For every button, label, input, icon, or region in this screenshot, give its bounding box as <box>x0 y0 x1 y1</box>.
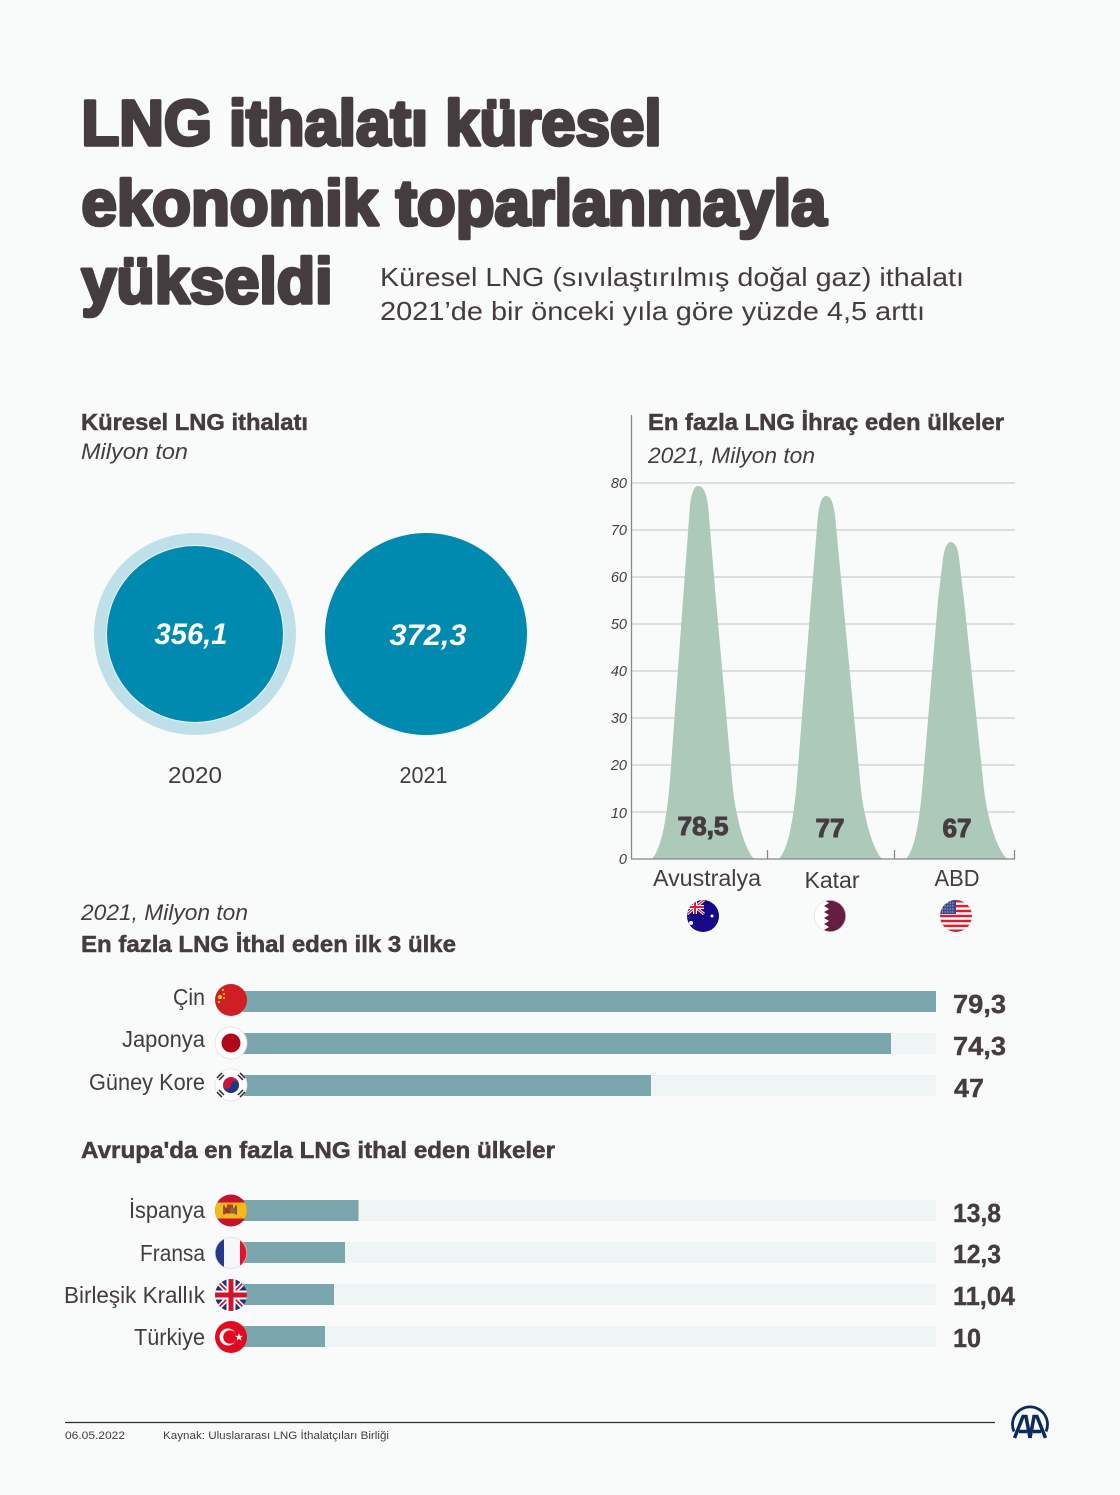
label: USA: ABD <box>934 865 980 891</box>
date: 06.05.2022 <box>65 1430 125 1442</box>
bar row: Turkey <box>134 1321 981 1353</box>
unit label: Milyon ton <box>81 439 188 464</box>
y axis labels: 70 <box>611 523 627 539</box>
icon: Qatar flag <box>814 900 846 932</box>
label: Qatar: Katar <box>804 867 860 893</box>
chart grid <box>631 483 1015 812</box>
bar row: South Korea: 47 <box>954 1073 984 1103</box>
circle 2020: 356,1 <box>154 618 228 651</box>
bar row: Japan: Japonya <box>122 1026 205 1052</box>
unit label: 2021, Milyon ton <box>80 900 248 925</box>
panel: Europe importers <box>64 1137 1016 1353</box>
axes <box>631 415 1015 859</box>
bar row: China: 79,3 <box>953 989 1006 1019</box>
label: Australia: Avustralya <box>653 865 761 891</box>
bar row: Spain <box>129 1194 1001 1228</box>
y axis labels: 0 <box>619 852 627 868</box>
title: LNG ithalatı küresel <box>82 87 662 159</box>
bar row: South Korea <box>89 1069 984 1103</box>
bar row: Turkey: Türkiye <box>134 1324 205 1350</box>
bar row: United Kingdom <box>64 1279 1016 1311</box>
y axis labels: 20 <box>610 758 627 774</box>
circle 2020 <box>94 533 296 735</box>
peak: Qatar <box>779 496 882 859</box>
bar row: United Kingdom: 11,04 <box>953 1281 1016 1311</box>
subtitle: 2021’de bir önceki yıla göre yüzde 4,5 arttı <box>380 296 925 326</box>
value: Australia: 78,5 <box>678 811 728 841</box>
bar row: France: Fransa <box>140 1240 205 1266</box>
bar row: Japan <box>122 1026 1006 1061</box>
peak: USA <box>906 542 1007 859</box>
bar row: France: 12,3 <box>953 1239 1001 1269</box>
value: Qatar: 77 <box>816 813 844 843</box>
bar row: Spain: 13,8 <box>953 1198 1001 1228</box>
y axis labels: 60 <box>611 570 627 586</box>
bar row: Spain: İspanya <box>129 1197 205 1223</box>
chart unit label: 2021, Milyon ton <box>647 443 815 468</box>
circle 2021 <box>325 533 527 735</box>
bar row: Turkey: 10 <box>953 1323 981 1353</box>
heading: global LNG imports: Küresel LNG ithalatı <box>81 409 308 435</box>
y axis labels: 50 <box>611 617 627 633</box>
subtitle <box>380 262 964 326</box>
footer <box>65 1407 1048 1442</box>
bar row: United Kingdom: Birleşik Krallık <box>64 1282 205 1308</box>
icon: USA flag <box>940 900 972 932</box>
icon: Australia flag <box>687 900 719 932</box>
heading: top 3 importers: En fazla LNG İthal eden ilk 3 ülke <box>81 931 456 957</box>
bar row: France <box>140 1237 1001 1269</box>
year label 2021: 2021 <box>400 762 448 788</box>
y axis labels: 10 <box>611 806 627 822</box>
heading: Europe importers: Avrupa'da en fazla LNG ithal eden ülkeler <box>81 1137 555 1163</box>
title: yükseldi <box>82 245 332 317</box>
circle 2021: 372,3 <box>390 619 467 652</box>
year label 2020: 2020 <box>168 762 222 788</box>
heading: top exporters: En fazla LNG İhraç eden ülkeler <box>648 409 1004 435</box>
bar row: South Korea: Güney Kore <box>89 1069 205 1095</box>
y axis labels: 30 <box>611 711 627 727</box>
peak: Australia <box>652 486 754 859</box>
title <box>82 87 827 317</box>
bar row: China <box>173 984 1006 1019</box>
icon: AA logo <box>1013 1407 1048 1438</box>
bar row: Japan: 74,3 <box>953 1031 1006 1061</box>
panel: top exporters chart <box>610 409 1015 932</box>
panel: global LNG imports <box>81 409 527 788</box>
subtitle: Küresel LNG (sıvılaştırılmış doğal gaz) ithalatı <box>380 262 964 292</box>
bar row: China: Çin <box>173 984 205 1010</box>
source: Kaynak: Uluslararası LNG İthalatçıları Birliği <box>163 1429 389 1442</box>
y axis labels <box>610 476 627 868</box>
y axis labels: 80 <box>611 476 627 492</box>
y axis labels: 40 <box>611 664 627 680</box>
panel: top 3 importers <box>80 900 1006 1103</box>
title: ekonomik toparlanmayla <box>82 167 827 239</box>
value: USA: 67 <box>942 813 972 843</box>
